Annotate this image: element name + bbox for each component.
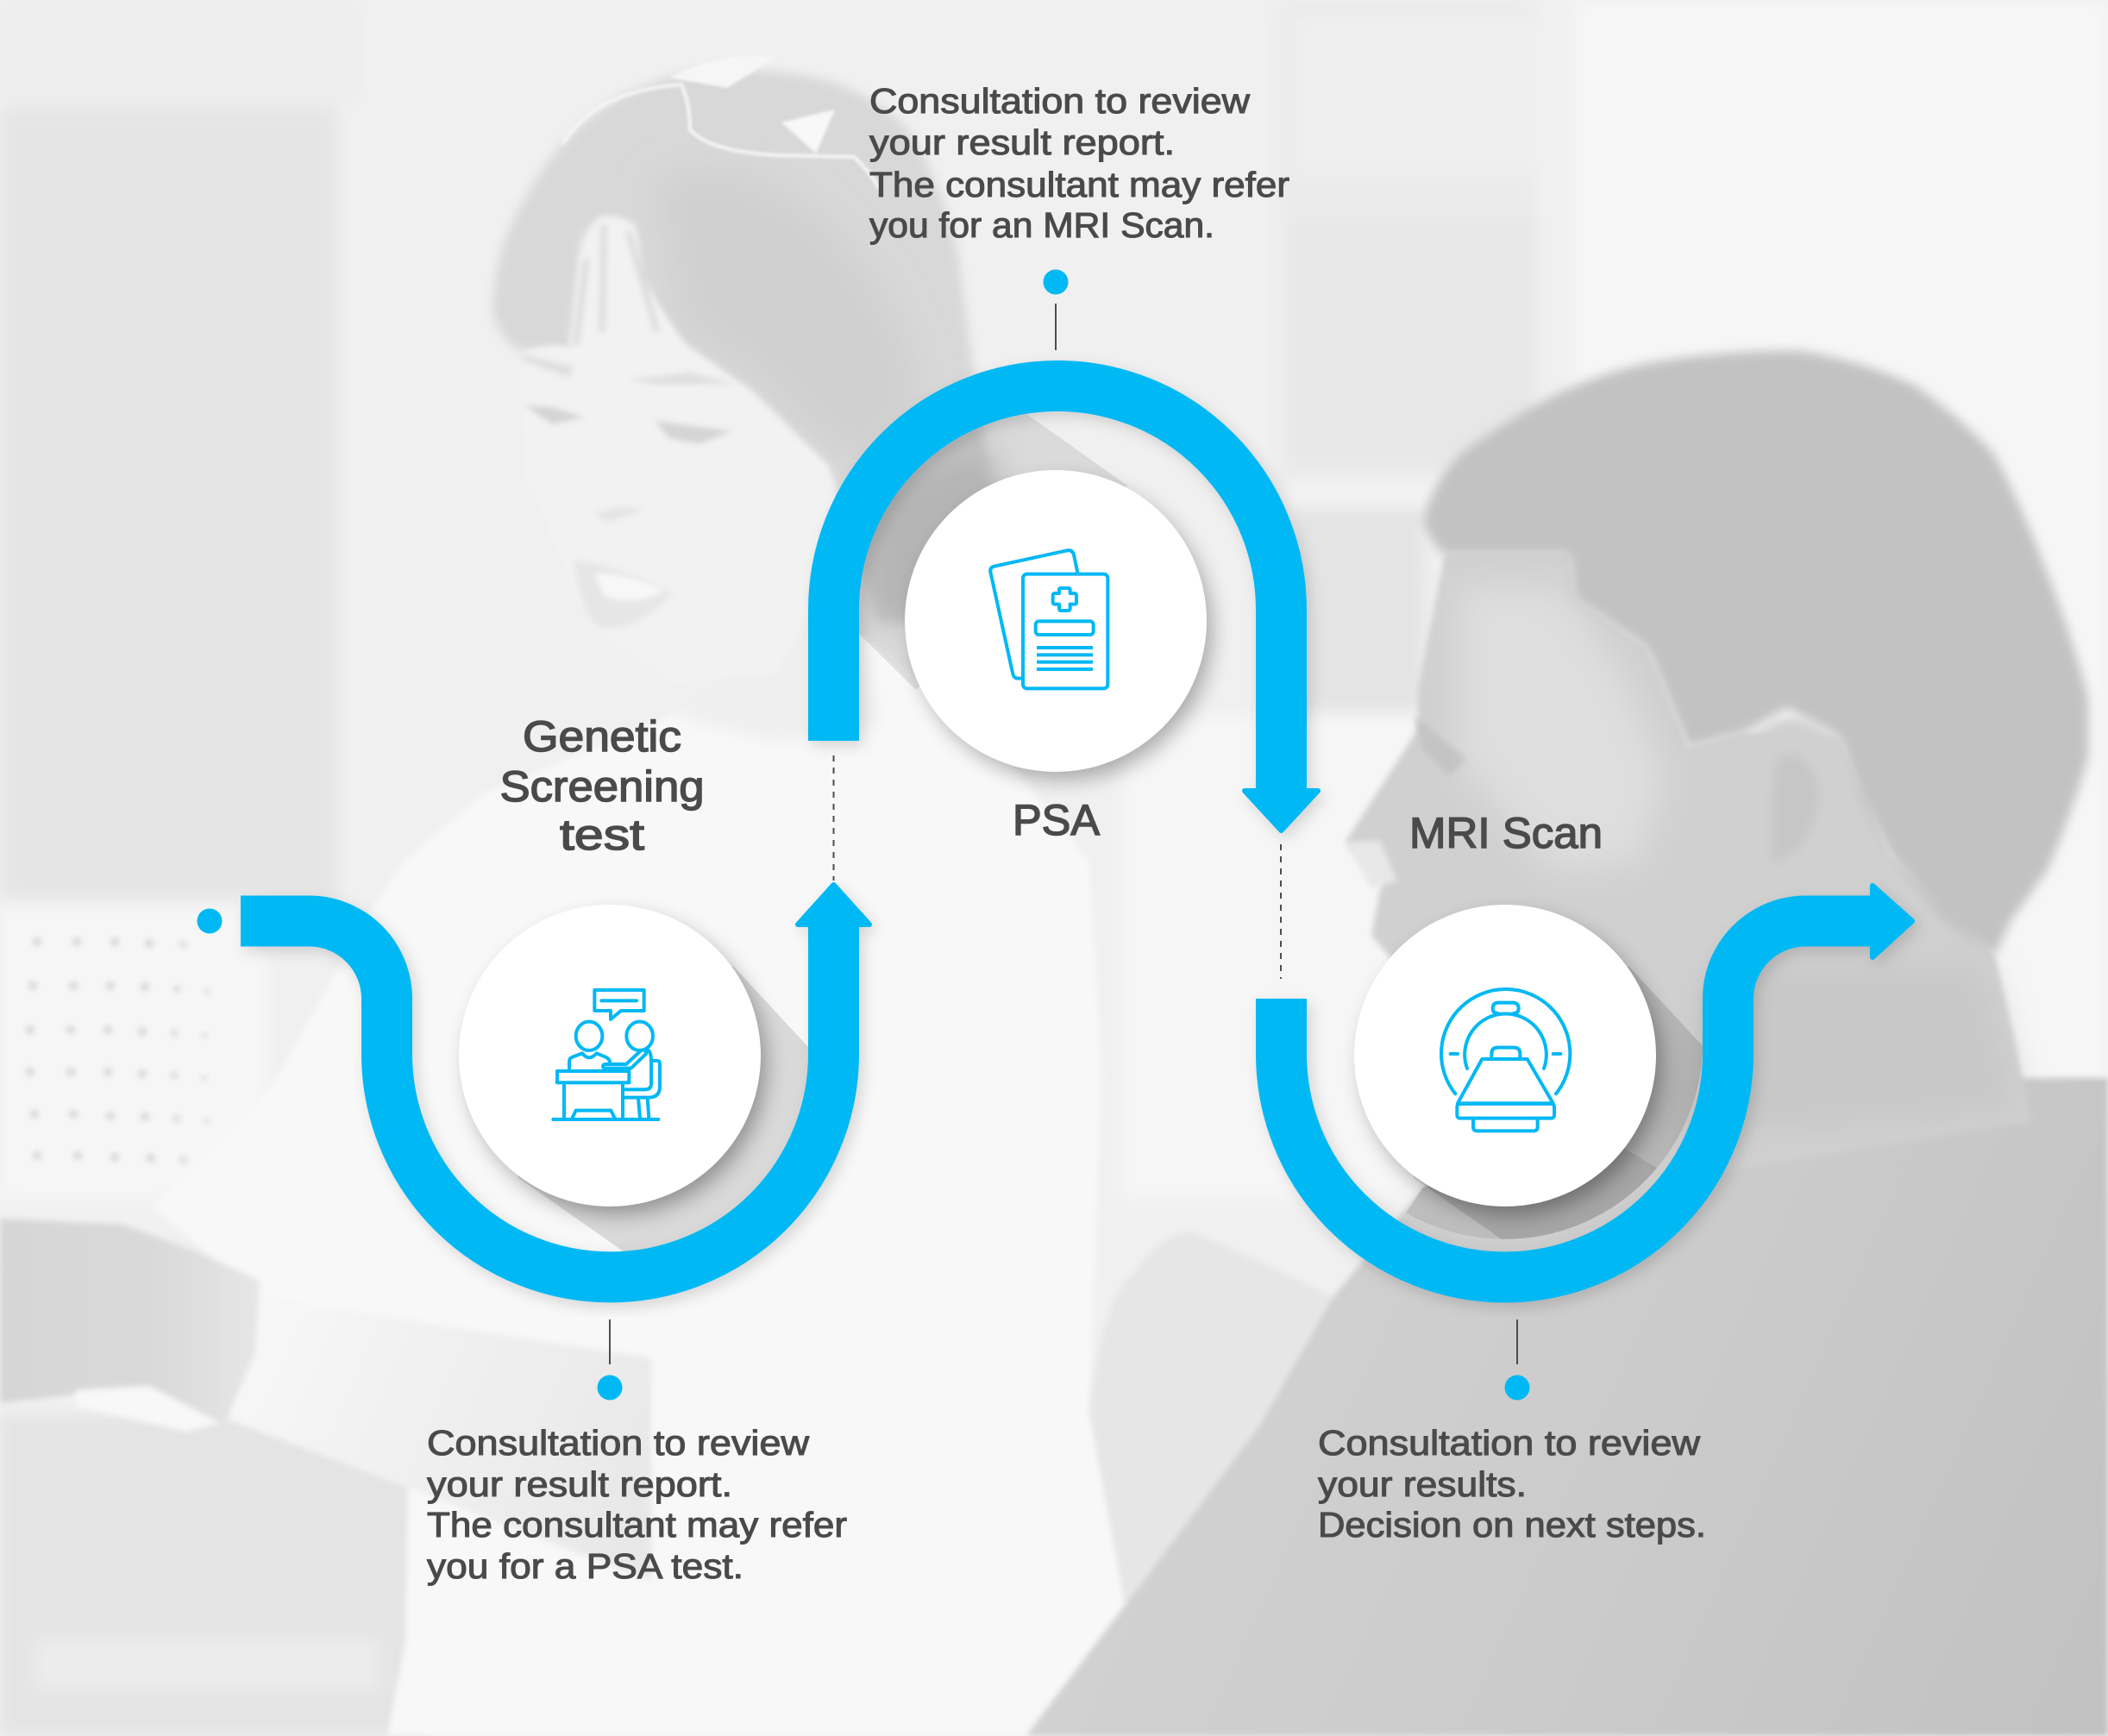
text: lower left note: Consultation to review: [427, 1423, 809, 1463]
text: top note: The consultant may refer: [869, 165, 1289, 204]
arrow segment 3: MRI scan: [1282, 886, 1912, 1277]
circle: MRI scan: [1354, 905, 1661, 1214]
arrow segment 1: genetic screening: [241, 885, 869, 1277]
heading: MRI Scan: MRI Scan: [1409, 809, 1603, 857]
text: lower right note: your results.: [1318, 1464, 1527, 1504]
circle: PSA: [905, 470, 1212, 780]
heading: genetic screening test: test: [560, 811, 644, 859]
decorative glasses: [562, 56, 880, 190]
dashed connector: test to PSA: [833, 755, 835, 881]
text: lower left note: your result report.: [427, 1464, 732, 1504]
connector: lower right note: [1504, 1319, 1530, 1401]
circle: genetic screening test: [459, 905, 766, 1214]
arrow segment 2: PSA: [833, 386, 1318, 830]
decorative chair dots: [26, 937, 210, 1163]
dashed connector: PSA to MRI: [1280, 844, 1282, 979]
connector: lower left note: [597, 1319, 623, 1401]
text: lower right note: [1318, 1423, 1706, 1545]
icon: medical report: [990, 550, 1107, 688]
start dot: [197, 909, 223, 933]
heading: genetic screening test: [500, 712, 704, 859]
text: top note: you for an MRI Scan.: [869, 205, 1214, 245]
long shadows of circles: [518, 414, 1844, 1397]
text: lower left note: [427, 1423, 847, 1586]
text: lower left note: you for a PSA test.: [427, 1546, 743, 1586]
heading: genetic screening test: Genetic: [523, 712, 681, 761]
icon: consultation at desk: [553, 990, 660, 1119]
decorative woman shapes: [0, 69, 1126, 1736]
text: top note: your result report.: [869, 122, 1175, 162]
text: lower right note: Decision on next steps.: [1318, 1505, 1706, 1545]
heading: PSA: PSA: [1013, 796, 1101, 844]
decorative man shapes: [1026, 351, 2108, 1736]
text: top note: [869, 81, 1289, 245]
connector: top note: [1044, 269, 1068, 350]
heading: genetic screening test: Screening: [500, 762, 704, 811]
text: top note: Consultation to review: [869, 81, 1250, 121]
text: lower left note: The consultant may refer: [427, 1505, 847, 1545]
icon: MRI machine: [1441, 989, 1570, 1131]
text: lower right note: Consultation to review: [1318, 1423, 1700, 1463]
